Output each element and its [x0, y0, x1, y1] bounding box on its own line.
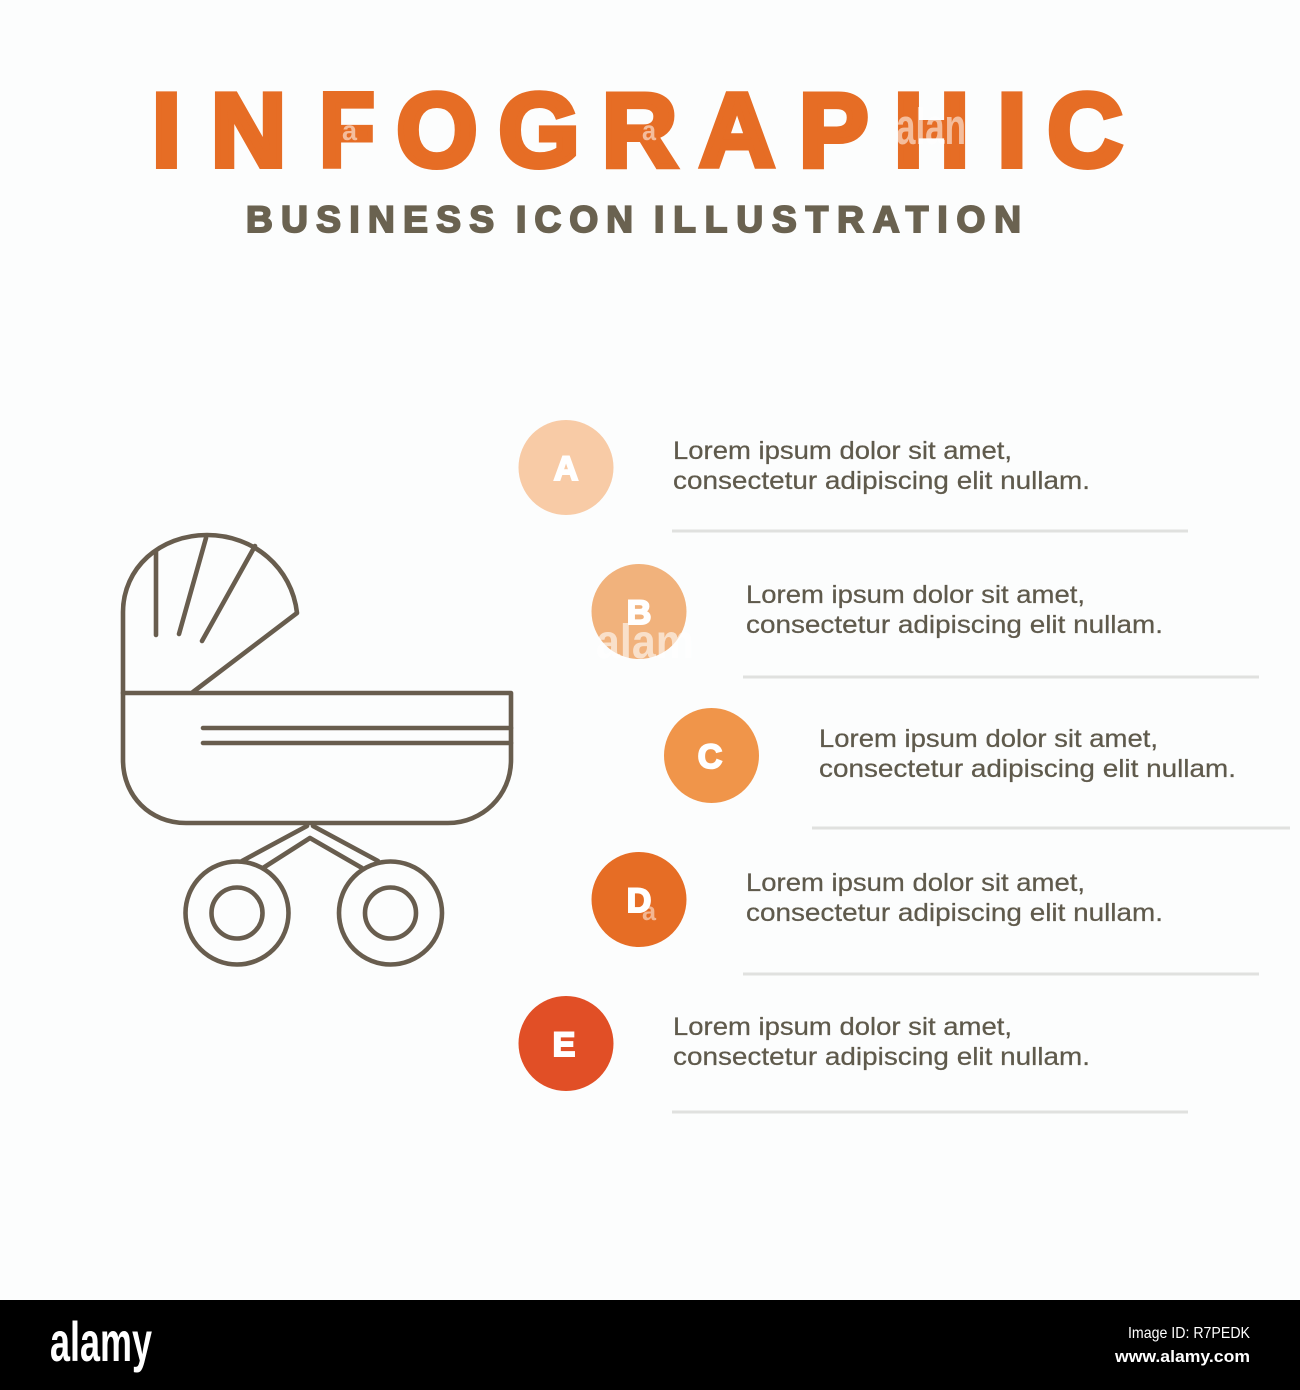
- circle E: [518, 996, 614, 1091]
- step D: [592, 852, 1259, 976]
- watermark: stock photo marks: alan: [896, 98, 966, 155]
- text A: Lorem ipsum dolor sit amet,: [673, 437, 1012, 465]
- watermark: stock photo marks: alam: [596, 616, 694, 669]
- step B: [592, 564, 1259, 678]
- circle D: D: [627, 882, 651, 920]
- left wheel: [186, 862, 288, 964]
- text A: consectetur adipiscing elit nullam.: [673, 467, 1090, 495]
- right wheel: [339, 862, 442, 964]
- title: OGRAPHIC: [396, 73, 1123, 189]
- step C: [664, 708, 1290, 830]
- circle A: A: [554, 450, 578, 488]
- text D: Lorem ipsum dolor sit amet,: [746, 869, 1085, 897]
- watermark: stock photo marks: a: [642, 896, 657, 926]
- carriage basket: [123, 693, 511, 823]
- circle A: [518, 420, 614, 515]
- text E: Lorem ipsum dolor sit amet,: [673, 1013, 1012, 1041]
- step E: [518, 996, 1188, 1114]
- subtitle: ILLUSTRATION: [654, 199, 1021, 240]
- icon: baby carriage: [123, 535, 511, 964]
- circle B: [592, 564, 686, 659]
- watermark: stock photo marks: a: [642, 115, 656, 146]
- title: IN: [152, 73, 286, 189]
- footer logo: alamy: [50, 1310, 152, 1373]
- watermark: stock photo marks: a: [342, 115, 357, 146]
- text C: Lorem ipsum dolor sit amet,: [819, 725, 1158, 753]
- text E: consectetur adipiscing elit nullam.: [673, 1043, 1090, 1071]
- circle C: C: [698, 738, 722, 776]
- text D: consectetur adipiscing elit nullam.: [746, 899, 1163, 927]
- circle E: E: [553, 1026, 575, 1064]
- footer band: [0, 1300, 1300, 1390]
- wheel axles: [242, 826, 378, 868]
- text B: consectetur adipiscing elit nullam.: [746, 611, 1163, 639]
- basket stripes: [203, 728, 511, 743]
- text B: Lorem ipsum dolor sit amet,: [746, 581, 1085, 609]
- title: F: [320, 73, 374, 189]
- website: www.alamy.com: [1114, 1347, 1250, 1366]
- subtitle: ICON: [516, 199, 633, 240]
- image id: Image ID: R7PEDK: [1128, 1325, 1250, 1342]
- watermark: stock photo marks: [342, 98, 966, 926]
- circle C: [664, 708, 759, 803]
- text C: consectetur adipiscing elit nullam.: [819, 755, 1236, 783]
- carriage hood: [123, 535, 297, 693]
- step A: [518, 420, 1188, 532]
- subtitle: BUSINESS: [246, 199, 494, 240]
- circle B: B: [627, 594, 651, 632]
- circle D: [592, 852, 686, 947]
- hood ribs: [156, 538, 255, 641]
